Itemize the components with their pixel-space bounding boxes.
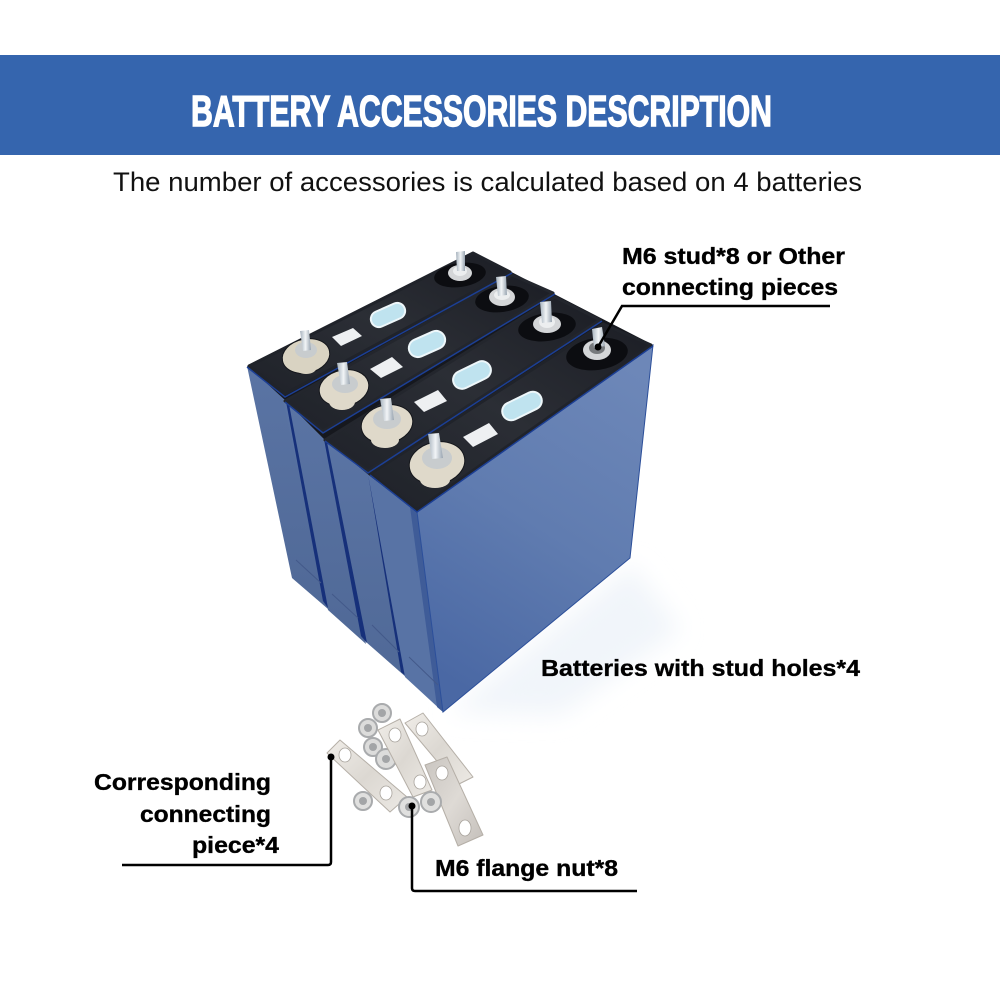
callout: connecting piece: Corresponding <box>94 769 271 795</box>
plate holes <box>339 722 471 836</box>
callout: M6 stud: connecting pieces <box>622 274 838 300</box>
cap blue trim <box>247 273 653 512</box>
subtitle: The number of accessories is calculated based on 4 batteries <box>113 167 862 197</box>
callout: connecting piece <box>94 754 334 865</box>
battery pack <box>247 251 680 715</box>
side seams <box>296 560 438 685</box>
flange nuts front <box>354 792 441 817</box>
battery front face <box>417 345 653 712</box>
battery top caps <box>247 253 653 512</box>
safety vents <box>368 300 545 423</box>
callout: flange nut <box>408 802 637 891</box>
battery side faces <box>247 366 443 712</box>
callout: connecting piece: connecting <box>140 801 271 827</box>
callout: flange nut: M6 flange nut*8 <box>435 855 618 881</box>
callout: M6 stud: M6 stud*8 or Other <box>622 243 845 269</box>
flange nuts behind <box>359 704 396 769</box>
callout: connecting piece: piece*4 <box>192 832 279 858</box>
positive terminals <box>279 330 469 489</box>
callout: M6 stud <box>594 243 845 350</box>
callout: batteries: Batteries with stud holes*4 <box>541 655 860 681</box>
accessories: connecting pieces and nuts <box>327 704 483 846</box>
title banner <box>0 55 1000 155</box>
white labels <box>332 328 498 447</box>
negative terminals <box>433 251 630 374</box>
connecting pieces <box>327 713 483 846</box>
